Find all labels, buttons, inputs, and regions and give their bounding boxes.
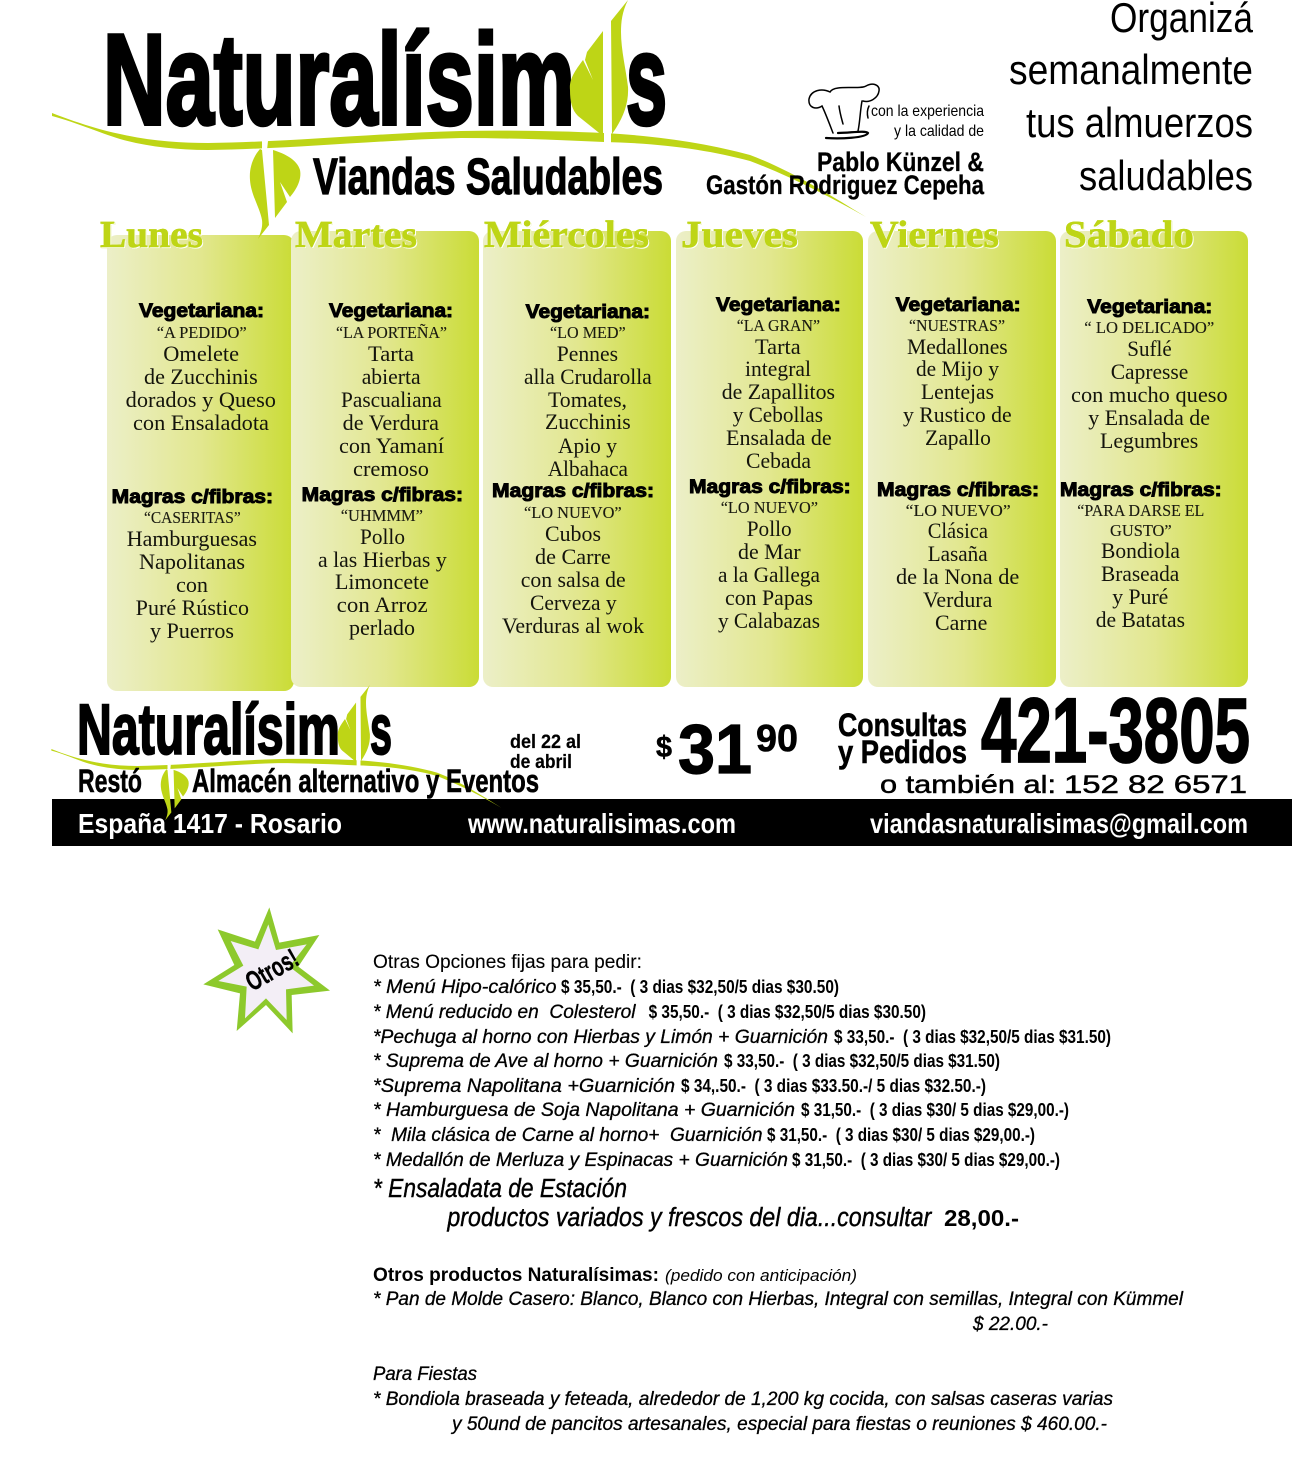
vegetarian menu: Tarta [368, 341, 414, 366]
chef credits: Gastón Rodriguez Cepeha [706, 170, 985, 200]
lean menu: y Puerros [150, 618, 234, 643]
lean menu: Pollo [360, 524, 405, 549]
vegetarian menu: Albahaca [548, 456, 628, 481]
vegetarian menu: dorados y Queso [126, 387, 276, 412]
vegetarian menu: Pascualiana [341, 387, 442, 412]
lean menu: Cubos [545, 521, 601, 546]
other products [373, 1265, 1184, 1335]
vegetarian menu: Lentejas [921, 379, 994, 404]
lean menu: a las Hierbas y [318, 547, 447, 572]
vegetarian menu: abierta [362, 364, 421, 389]
item: $ 34,.50.- ( 3 dias $33.50.-/ 5 dias $32.50.-) [681, 1075, 986, 1096]
vegetarian menu: con mucho queso [1071, 382, 1228, 407]
vegetarian menu: con Yamaní [339, 433, 444, 458]
small tagline: Restó: Restó [78, 763, 142, 799]
party offer: y 50und de pancitos artesanales, especial para fiestas o reuniones $ 460.00.- [450, 1413, 1107, 1435]
vegetarian menu: Vegetariana: [526, 302, 650, 323]
chef credits [706, 103, 985, 200]
bread: * Pan de Molde Casero: Blanco, Blanco con Hierbas, Integral con semillas, Integral con Kümmel [373, 1288, 1184, 1310]
list heading: Otras Opciones fijas para pedir: [373, 951, 642, 973]
vegetarian menu: “LO MED” [550, 323, 626, 342]
vegetarian menu: de Verdura [343, 410, 439, 435]
lean menu: con Arroz [337, 592, 428, 617]
vegetarian menu: Ensalada de [726, 425, 832, 450]
vegetarian menu: Suflé [1127, 336, 1172, 361]
item [373, 1099, 1069, 1121]
seasonal salad [373, 1175, 1019, 1232]
vegetarian menu: Vegetariana: [329, 301, 453, 322]
seasonal salad: 28,00.- [944, 1205, 1019, 1231]
chef credits: y la calidad de [894, 123, 984, 140]
lean menu: Napolitanas [139, 549, 245, 574]
small brand title: s [370, 691, 392, 770]
products heading: Otros productos Naturalísimas: [373, 1265, 659, 1286]
lean menu [492, 481, 654, 638]
lean menu: Braseada [1101, 561, 1180, 586]
vegetarian menu [716, 295, 841, 473]
alternate phone: 152 82 6571 [1064, 771, 1247, 799]
lean menu: de la Nona de [896, 564, 1019, 589]
lean menu: Magras c/fibras: [302, 485, 463, 506]
vegetarian menu: de Mijo y [916, 356, 999, 381]
vegetarian menu [126, 301, 276, 435]
vegetarian menu: Medallones [907, 334, 1008, 359]
lean menu: “UHMMM” [341, 506, 423, 525]
alternate phone: o también al: [880, 771, 1056, 799]
date text [510, 732, 581, 773]
lean menu [689, 477, 851, 633]
bread [373, 1288, 1184, 1335]
party offer: * Bondiola braseada y feteada, alrededor de 1,200 kg cocida, con salsas caseras varias [373, 1388, 1113, 1410]
lean menu: Bondiola [1101, 538, 1180, 563]
address: España 1417 - Rosario [78, 808, 342, 839]
lean menu: Magras c/fibras: [689, 477, 851, 498]
lean menu: de Carre [535, 544, 611, 569]
lean menu: GUSTO” [1110, 521, 1172, 540]
lean menu: Lasaña [928, 541, 988, 566]
price [656, 710, 798, 788]
lean menu: Clásica [928, 518, 988, 543]
contact label [838, 707, 967, 770]
item [373, 1050, 1000, 1072]
vegetarian menu: Zapallo [925, 425, 991, 450]
item [373, 1149, 1060, 1171]
item [373, 1075, 986, 1097]
item [373, 976, 839, 998]
icon: vine and leaves logo [52, 0, 866, 239]
price: $ [656, 731, 672, 764]
vegetarian menu: y Rustico de [903, 402, 1012, 427]
item: $ 33,50.- ( 3 dias $32,50/5 dias $31.50) [834, 1026, 1111, 1047]
tagline: tus almuerzos [1026, 99, 1253, 146]
tagline: semanalmente [1009, 46, 1253, 93]
vegetarian menu: Zucchinis [545, 409, 631, 434]
lean menu: con salsa de [521, 567, 626, 592]
vegetarian menu: Tarta [755, 334, 801, 359]
lean menu: Verdura [923, 587, 993, 612]
vegetarian menu: “LA GRAN” [737, 316, 820, 335]
vegetarian menu: Vegetariana: [716, 295, 841, 316]
item [373, 1026, 1111, 1048]
icon: star badge [203, 907, 330, 1033]
vegetarian menu: Tomates, [548, 387, 627, 412]
lean menu: Puré Rústico [136, 595, 249, 620]
item: * Suprema de Ave al horno + Guarnición [373, 1050, 718, 1072]
vegetarian menu: Cebada [746, 448, 811, 473]
vegetarian menu [1071, 297, 1228, 453]
item: *Pechuga al horno con Hierbas y Limón + Guarnición [373, 1026, 828, 1048]
lean menu: Magras c/fibras: [112, 487, 273, 508]
lean menu: “LO NUEVO” [906, 501, 1011, 520]
lean menu: a la Gallega [718, 562, 820, 587]
day heading: Viernes: Viernes [870, 214, 999, 256]
products heading: (pedido con anticipación) [665, 1266, 857, 1285]
vegetarian menu: “ LO DELICADO” [1084, 318, 1214, 337]
tagline: saludables [1079, 152, 1253, 199]
lean menu [877, 480, 1039, 635]
vegetarian menu: “A PEDIDO” [157, 323, 247, 342]
brand title: Naturalísim [103, 8, 575, 152]
vegetarian menu: integral [745, 356, 811, 381]
item: * Mila clásica de Carne al horno+ Guarnición [373, 1124, 762, 1146]
item: $ 33,50.- ( 3 dias $32,50/5 dias $31.50) [724, 1050, 1000, 1071]
panel: Sábado [1060, 214, 1248, 687]
item: $ 31,50.- ( 3 dias $30/ 5 dias $29,00.-) [792, 1149, 1060, 1170]
day heading: Lunes: Lunes [100, 214, 203, 256]
icon: small vine and leaves logo [51, 685, 501, 820]
vegetarian menu: Vegetariana: [1087, 297, 1212, 318]
vegetarian menu: con Ensaladota [133, 410, 269, 435]
chef credits: con la experiencia [871, 103, 984, 120]
contact bar [52, 799, 1292, 846]
vegetarian menu: “LA PORTEÑA” [336, 323, 447, 342]
item: * Hamburguesa de Soja Napolitana + Guarnición [373, 1099, 795, 1121]
bread: $ 22.00.- [972, 1313, 1048, 1335]
vegetarian menu: Vegetariana: [139, 301, 264, 322]
vegetarian menu: “NUESTRAS” [909, 316, 1005, 335]
lean menu: Magras c/fibras: [492, 481, 654, 502]
vegetarian menu: Vegetariana: [896, 295, 1021, 316]
day heading: Jueves: Jueves [681, 214, 798, 256]
brand title: s [626, 8, 667, 152]
lean menu: Hamburguesas [127, 526, 257, 551]
lean menu: Carne [935, 610, 987, 635]
vegetarian menu: Pennes [557, 341, 618, 366]
website: www.naturalisimas.com [467, 808, 736, 839]
item: * Menú reducido en Colesterol [373, 1001, 636, 1023]
lean menu: perlado [349, 615, 415, 640]
date text: del 22 al [510, 732, 581, 753]
day heading: Martes: Martes [295, 214, 417, 256]
vegetarian menu: cremoso [353, 456, 429, 481]
vegetarian menu: Omelete [163, 341, 239, 366]
seasonal salad: * Ensaladata de Estación [373, 1175, 627, 1203]
party offer [373, 1363, 1113, 1435]
vegetarian menu [524, 302, 652, 481]
day heading: Sábado: Sábado [1064, 214, 1194, 256]
lean menu: de Batatas [1096, 607, 1185, 632]
tagline [1009, 0, 1254, 199]
other options list [373, 951, 1111, 1232]
item: * Medallón de Merluza y Espinacas + Guarnición [373, 1149, 788, 1171]
lean menu: Magras c/fibras: [1060, 480, 1222, 501]
lean menu: con Papas [725, 585, 813, 610]
lean menu: Magras c/fibras: [877, 480, 1039, 501]
vegetarian menu: y Cebollas [733, 402, 823, 427]
panel: Lunes [100, 214, 294, 691]
item: * Menú Hipo-calórico [373, 976, 557, 998]
seasonal salad: productos variados y frescos del dia...consultar [446, 1204, 933, 1232]
lean menu: “LO NUEVO” [524, 503, 622, 522]
panel: Martes [291, 214, 479, 687]
lean menu: “PARA DARSE EL [1077, 501, 1204, 520]
lean menu: y Calabazas [718, 608, 820, 633]
small brand title: Naturalísim [77, 691, 340, 770]
subtitle: Viandas Saludables [313, 148, 663, 205]
vegetarian menu [896, 295, 1021, 450]
item [373, 1124, 1035, 1146]
item: $ 35,50.- ( 3 dias $32,50/5 dias $30.50) [649, 1001, 926, 1022]
lean menu [112, 487, 273, 643]
price: 90 [756, 718, 798, 760]
vegetarian menu: y Ensalada de [1088, 405, 1210, 430]
vegetarian menu: alla Crudarolla [524, 364, 652, 389]
item: $ 31,50.- ( 3 dias $30/ 5 dias $29,00.-) [801, 1099, 1069, 1120]
panel: Viernes [868, 214, 1056, 687]
item: $ 31,50.- ( 3 dias $30/ 5 dias $29,00.-) [767, 1124, 1035, 1145]
vegetarian menu [329, 301, 453, 481]
small tagline: Almacén: Almacén alternativo y Eventos [192, 763, 539, 799]
lean menu [302, 485, 463, 640]
vegetarian menu: Apio y [558, 433, 617, 458]
lean menu: con [176, 572, 208, 597]
vegetarian menu: Capresse [1111, 359, 1188, 384]
contact label: Consultas [838, 707, 967, 743]
lean menu: Limoncete [335, 569, 429, 594]
panel: Miércoles [483, 214, 671, 687]
icon: chef hat [809, 84, 879, 138]
party offer: Para Fiestas [373, 1363, 477, 1385]
vegetarian menu: de Zapallitos [722, 379, 835, 404]
price: 31 [678, 710, 752, 788]
lean menu: Cerveza y [530, 590, 617, 615]
vegetarian menu: Legumbres [1100, 428, 1198, 453]
chef credits: Pablo Künzel & [817, 147, 984, 177]
badge label: Otros! [240, 943, 304, 997]
item: *Suprema Napolitana +Guarnición [373, 1075, 675, 1097]
lean menu: “LO NUEVO” [721, 498, 818, 517]
alternate phone [880, 771, 1247, 799]
vegetarian menu: de Zucchinis [144, 364, 258, 389]
lean menu: Verduras al wok [502, 613, 644, 638]
lean menu: y Puré [1112, 584, 1168, 609]
lean menu: de Mar [738, 539, 801, 564]
contact label: y Pedidos [838, 734, 967, 770]
item [373, 1001, 926, 1023]
item: $ 35,50.- ( 3 dias $32,50/5 dias $30.50) [561, 976, 839, 997]
lean menu [1060, 480, 1222, 632]
lean menu: “CASERITAS” [144, 508, 241, 527]
lean menu: Pollo [747, 516, 792, 541]
panel: Jueves [676, 214, 863, 687]
day heading: Miércoles: Miércoles [484, 214, 649, 256]
date text: de abril [510, 752, 572, 773]
products heading [373, 1265, 857, 1286]
